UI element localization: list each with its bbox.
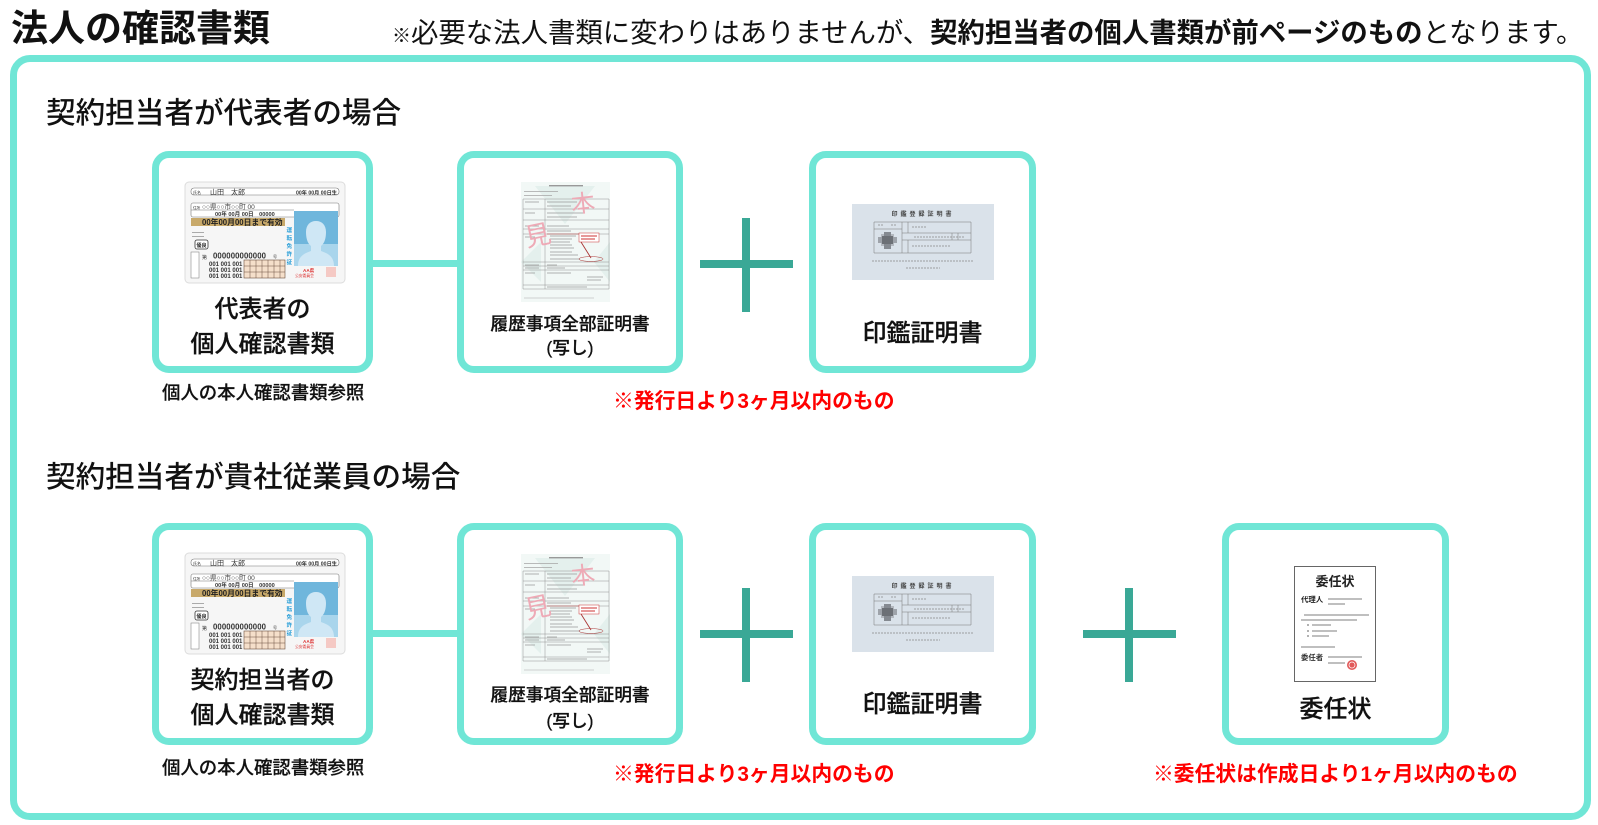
label: copy: (写し) [546,338,594,358]
icon: certificate document [521,182,610,302]
heading: employee case: 契約担当者が貴社従業員の場合 [46,461,460,494]
note: issue date requirement row 2: ※発行日より3ヶ月以内のもの [613,763,895,786]
icon: driver license: 000000000000 [213,252,267,260]
label: contact person: 契約担当者の [190,667,334,694]
label: identity documents: 個人確認書類 [190,331,334,358]
label: identity documents: 個人確認書類 [190,702,334,729]
icon: seal certificate: 印鑑登録証明書 [891,582,955,590]
icon: driver license: 001 001 001 [209,633,243,639]
icon: driver license: 号 [273,625,277,630]
panel: seal certificate [809,523,1036,745]
icon: power of attorney document: 委任者 [1301,653,1324,662]
icon: driver license: 00年00月00日まで有効 [202,217,283,227]
panel: contact person identity documents [152,523,373,745]
icon: driver license: 公安委員会 [295,644,314,649]
icon: driver license: 号 [273,254,277,259]
icon: driver license [184,552,346,654]
connector line: row 2 [372,630,458,637]
icon: driver license [184,182,346,284]
note: issue date requirement row 1: ※発行日より3ヶ月以内のもの [613,390,895,413]
icon: power of attorney document: 委任状 [1315,574,1355,589]
icon: driver license: 000000000000 [213,622,267,632]
connector line: row 1 [372,260,458,267]
title: 法人の確認書類 [11,8,270,49]
note: power of attorney date requirement: ※委任状は作成日より1ヶ月以内のもの [1153,763,1518,786]
icon: driver license: 001 001 001 [209,262,243,268]
panel: certificate of registered matters [457,151,683,373]
icon: plus row 2 left [700,588,793,682]
icon: certificate document: 本 [570,190,596,219]
label: copy: (写し) [546,711,594,731]
icon: power of attorney document: 代理人 [1301,595,1324,604]
icon: driver license: 免 [286,613,292,621]
icon: driver license: 00年 00月 00日生 [296,188,337,196]
icon: seal certificate: 印鑑登録証明書 [891,210,955,218]
icon: certificate document [521,554,610,674]
icon: driver license: 証 [286,259,292,266]
icon: driver license: 氏名 [193,189,201,195]
icon: power of attorney document [1294,566,1376,682]
header note: ※必要な法人書類に変わりはありませんが、契約担当者の個人書類が前ページのものとなります。 [392,17,1583,48]
icon: driver license: 転 [286,605,292,613]
icon: driver license: 00年 00月 00日 00000 [215,210,275,218]
label: power of attorney: 委任状 [1300,696,1372,723]
icon: driver license: 住所 [193,576,201,581]
note: personal documents reference: 個人の本人確認書類参照 [162,382,364,403]
icon: seal certificate [852,204,994,280]
icon: driver license: 運 [286,226,292,234]
icon: plus row 1 [700,218,793,312]
panel: power of attorney [1222,523,1449,745]
panel: seal certificate [809,151,1036,373]
label: certificate name: 履歴事項全部証明書 [490,314,650,334]
icon: driver license: 001 001 001 [209,268,243,274]
label: certificate name: 履歴事項全部証明書 [490,685,650,705]
icon: driver license: 001 001 001 [209,639,243,645]
icon: driver license: 優良 [196,242,207,249]
icon: driver license: 許 [286,250,292,258]
label: representative: 代表者の [214,296,310,323]
icon: driver license: ○○県○○市○○町 00 [202,573,255,582]
icon: driver license: 001 001 001 [209,645,243,651]
icon: driver license: AA県 [303,638,315,645]
icon: driver license: 00年00月00日まで有効 [202,588,283,598]
icon: driver license: AA県 [303,267,315,274]
icon: driver license: 第 [202,625,207,632]
icon: driver license: 山田 太郎 [210,188,245,197]
icon: certificate document: 本 [570,562,596,591]
icon: driver license: 001 001 001 [209,274,243,280]
icon: driver license: 住所 [193,205,201,210]
panel: certificate of registered matters [457,523,683,745]
icon: driver license: 00年 00月 00日 00000 [215,581,275,589]
icon: driver license: 転 [286,234,292,242]
icon: certificate document: 見 [522,590,554,625]
icon: driver license: 許 [286,621,292,629]
note: personal documents reference: 個人の本人確認書類参照 [162,757,364,778]
icon: driver license: 山田 太郎 [210,559,245,568]
label: seal certificate: 印鑑証明書 [862,320,982,347]
panel: representative identity documents [152,151,373,373]
icon: driver license: 第 [202,254,207,261]
icon: plus row 2 right [1083,588,1176,682]
heading: representative case: 契約担当者が代表者の場合 [46,97,401,130]
icon: driver license: 運 [286,597,292,605]
icon: driver license: ○○県○○市○○町 00 [202,202,255,211]
label: seal certificate: 印鑑証明書 [862,691,982,718]
icon: driver license: 00年 00月 00日生 [296,559,337,567]
icon: certificate document: 見 [522,218,554,253]
icon: driver license: 証 [286,630,292,637]
icon: driver license: 優良 [196,613,207,620]
icon: driver license: 公安委員会 [295,273,314,278]
icon: seal certificate [852,576,994,652]
icon: driver license: 免 [286,242,292,250]
icon: driver license: 氏名 [193,560,201,566]
